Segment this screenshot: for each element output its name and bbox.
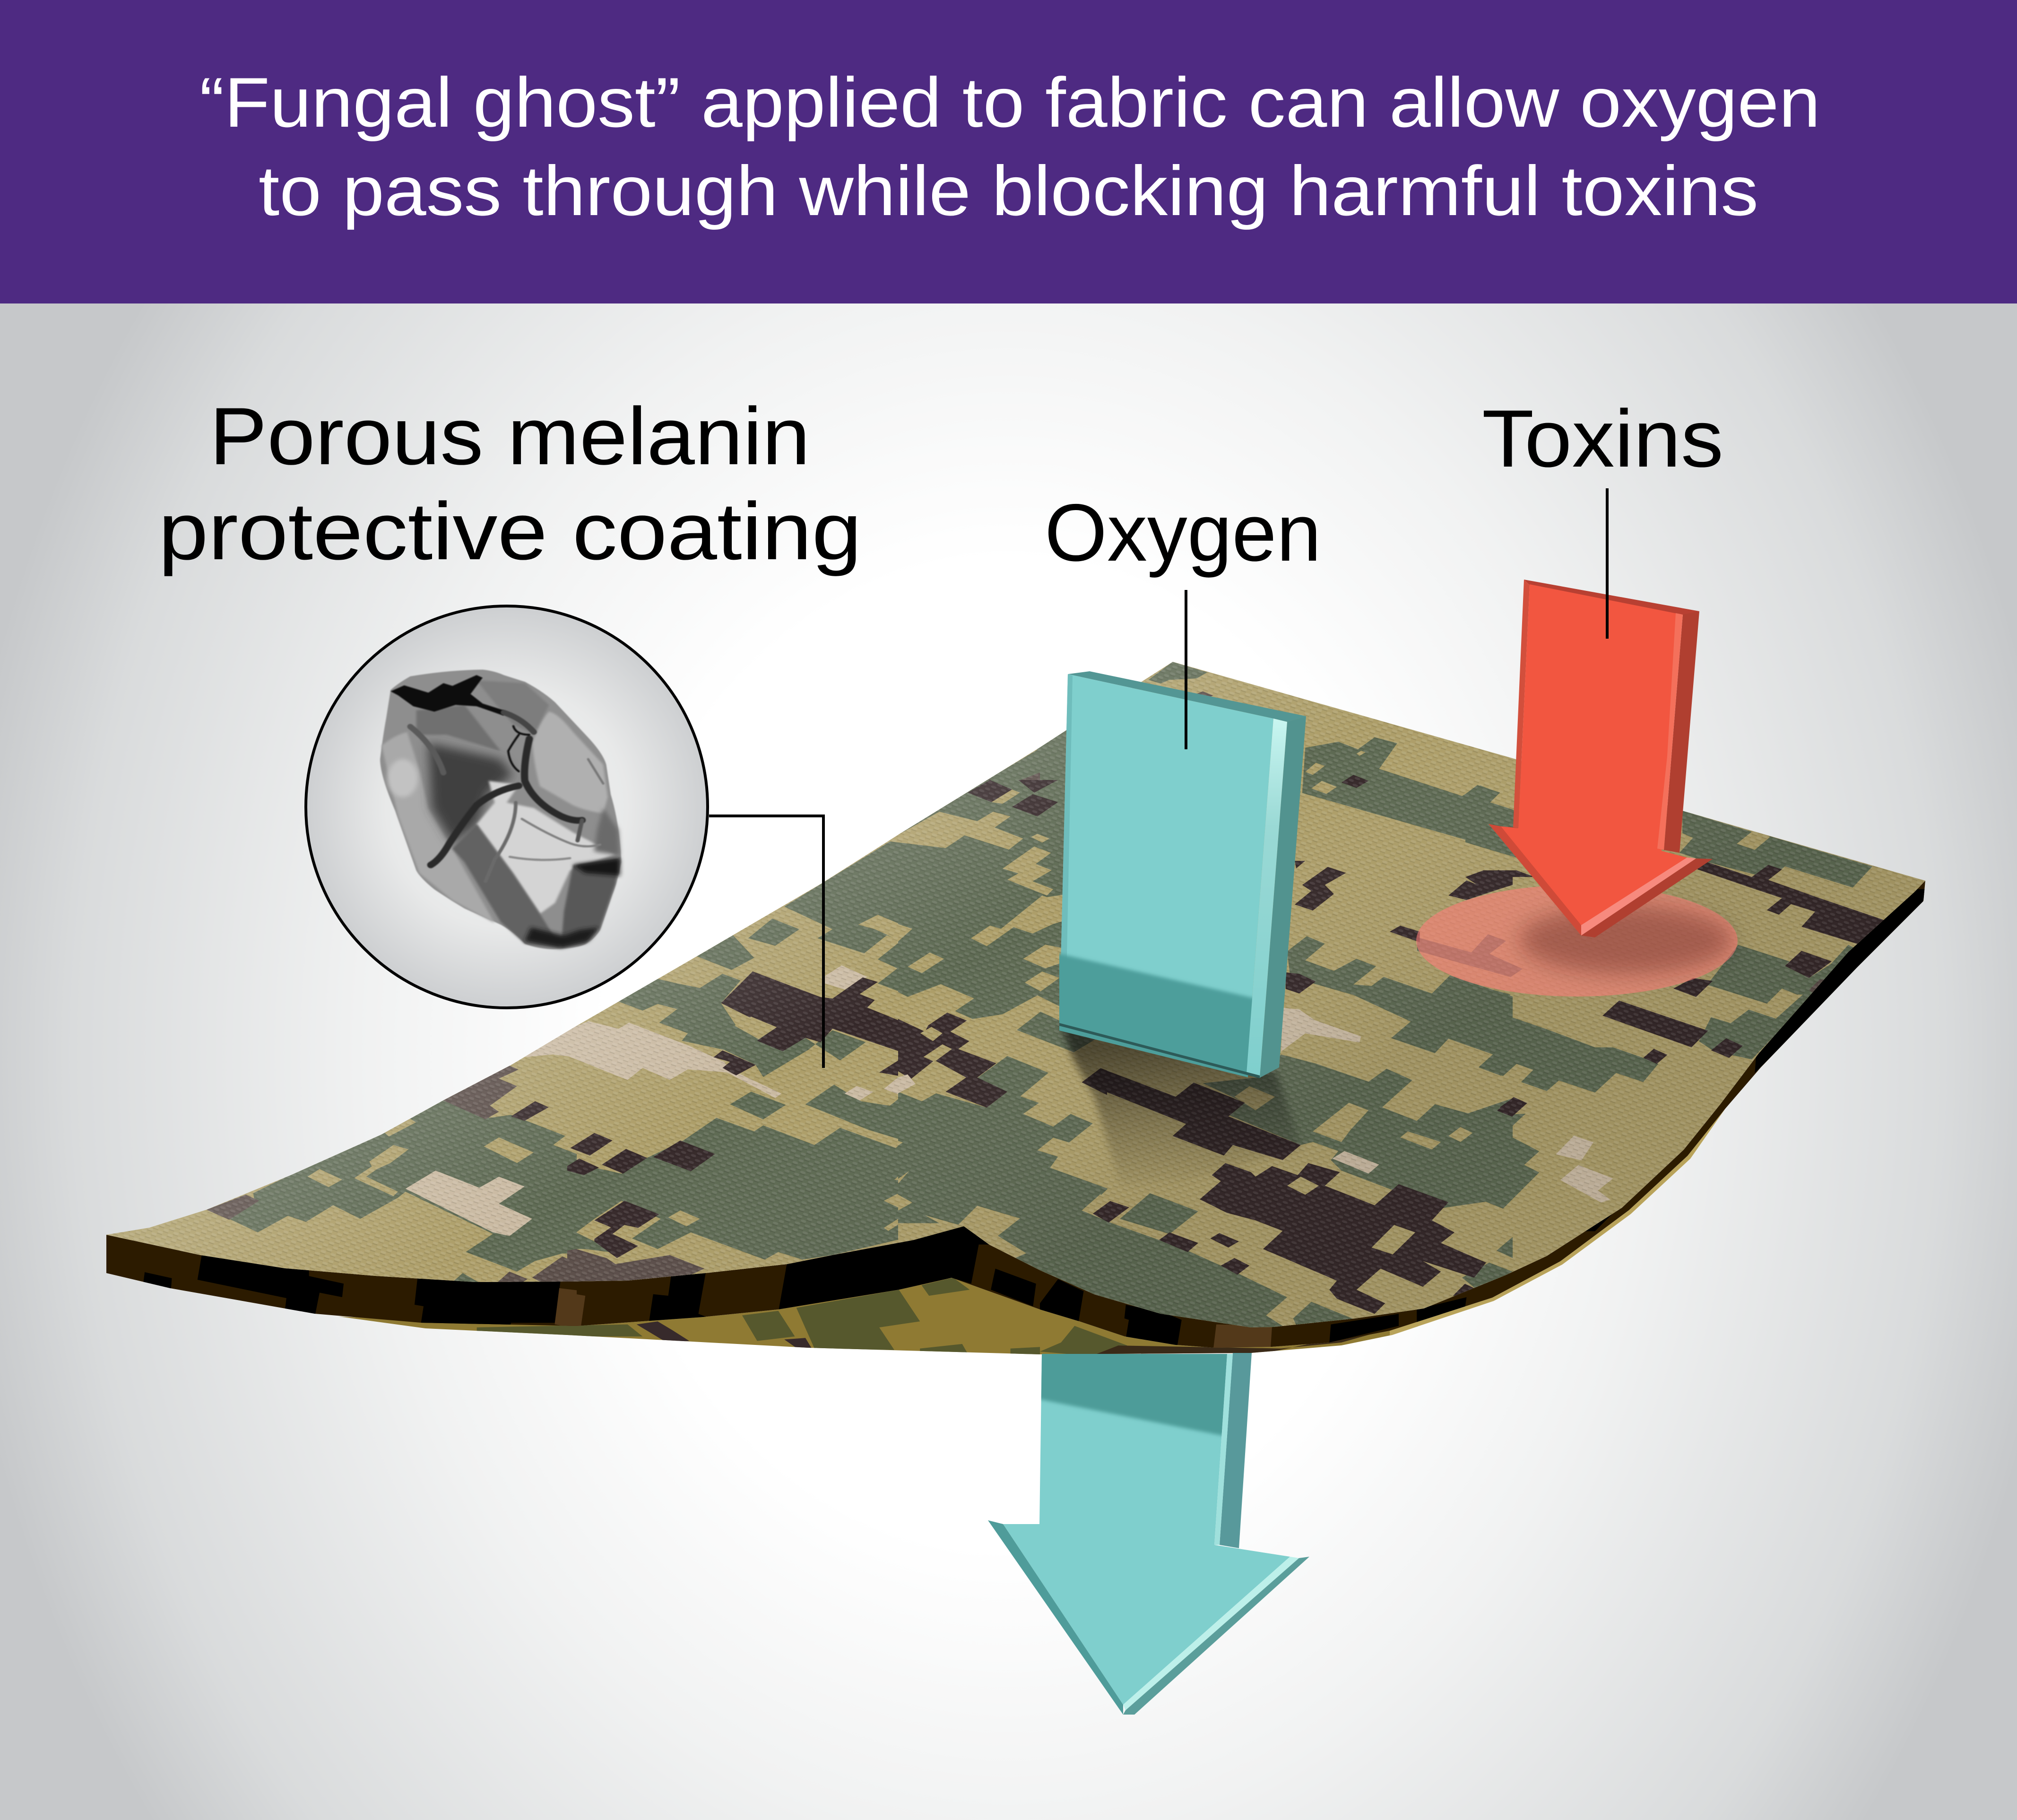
fabric sheet bbox=[95, 652, 1938, 1357]
camo patch left of and below the oxygen arrow bbox=[879, 780, 1234, 1276]
oxygen arrow: lower part passing through fabric bbox=[988, 1347, 1309, 1715]
shadow under oxygen arrow bbox=[1061, 1026, 1302, 1187]
leader line: melanin coating bbox=[709, 816, 823, 1068]
label: porous melanin protective coating: Porous melanin bbox=[209, 391, 810, 482]
label: oxygen: Oxygen bbox=[1045, 487, 1321, 578]
fabric weave texture bbox=[95, 652, 1938, 1338]
oxygen arrow: upper block bbox=[1054, 671, 1306, 1087]
title banner: to pass through while blocking harmful toxins bbox=[259, 151, 1758, 230]
green camo patches bbox=[229, 662, 1872, 1332]
leader line: oxygen bbox=[1185, 590, 1187, 749]
toxin blocked zone: pink ellipse bbox=[1416, 885, 1738, 997]
label: porous melanin protective coating bbox=[158, 391, 862, 577]
title banner: “Fungal ghost” applied to fabric can allow oxygen bbox=[199, 63, 1820, 142]
fabric underside bbox=[339, 1109, 1725, 1354]
label: toxins: Toxins bbox=[1482, 393, 1723, 484]
khaki, pink and dark camo details bbox=[207, 692, 1886, 1314]
title banner bbox=[0, 0, 2017, 303]
label: porous melanin protective coating: protective coating bbox=[158, 486, 862, 577]
toxin arrow (red, blocked) bbox=[1489, 580, 1713, 937]
fabric cut edge bbox=[95, 875, 1938, 1357]
inset: melanin ghost micrograph in circle bbox=[306, 606, 708, 1008]
fabric top surface: camouflage bbox=[95, 652, 1938, 1338]
leader line: toxins bbox=[1606, 488, 1609, 639]
